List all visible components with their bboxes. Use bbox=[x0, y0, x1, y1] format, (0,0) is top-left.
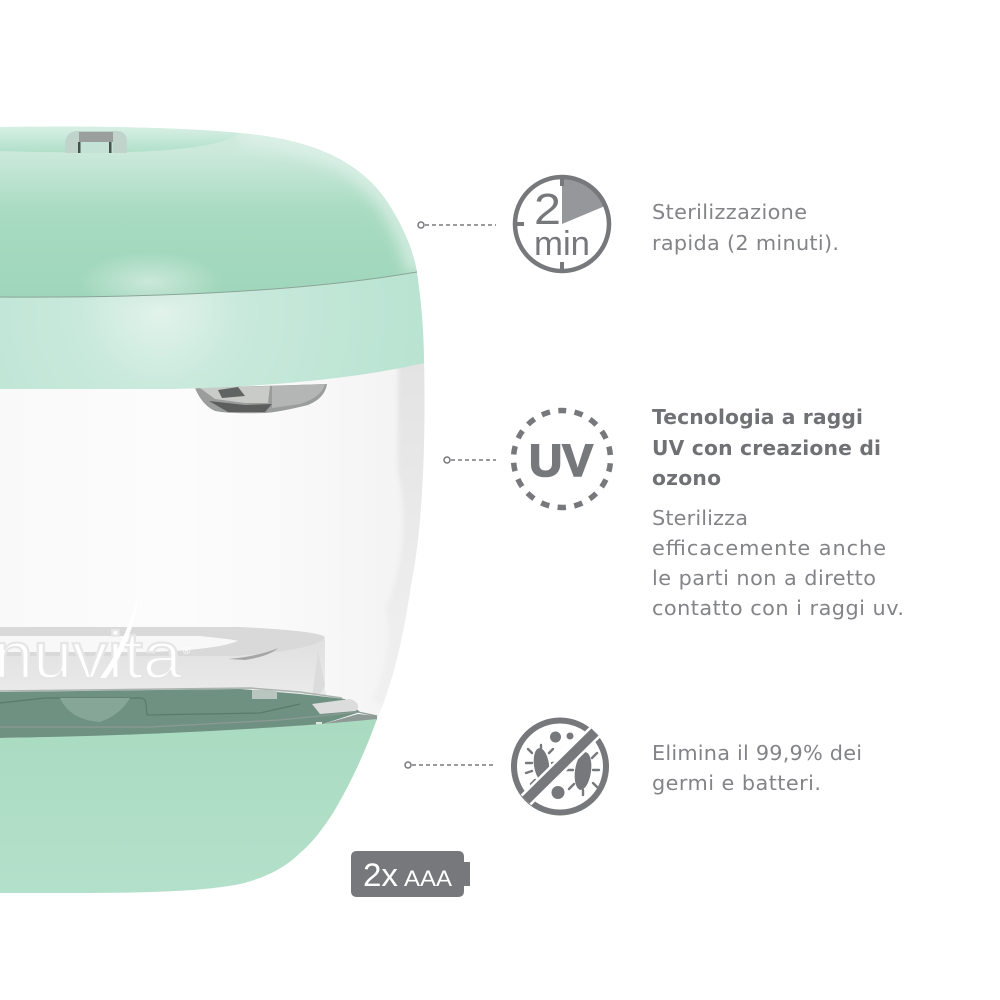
text: kills germs: Elimina il 99,9% dei bbox=[652, 741, 862, 765]
connector: UV bbox=[444, 457, 496, 463]
description bbox=[652, 506, 904, 620]
logo: nuvita: ® bbox=[183, 646, 191, 657]
text: fast sterilization: rapida (2 minuti). bbox=[652, 231, 839, 255]
logo: nuvita bbox=[0, 596, 191, 692]
description: contatto con i raggi uv. bbox=[652, 596, 904, 620]
inner tray bbox=[0, 627, 330, 705]
transparent glass body bbox=[0, 360, 424, 740]
dome edge highlight bbox=[240, 134, 417, 272]
text: kills germs: germi e batteri. bbox=[652, 771, 821, 795]
top button bbox=[65, 131, 127, 153]
glass side reflection bbox=[398, 363, 424, 566]
icon: 2 min timer: 2 bbox=[534, 185, 561, 234]
sensor under the lid bbox=[195, 384, 327, 413]
heading: ozono bbox=[652, 466, 721, 490]
tinted base window bbox=[0, 688, 377, 738]
heading bbox=[652, 405, 881, 490]
heading: Tecnologia a raggi bbox=[652, 405, 863, 429]
description: Sterilizza bbox=[652, 506, 748, 530]
description: le parti non a diretto bbox=[652, 566, 876, 590]
connector: timer bbox=[418, 222, 496, 228]
lid seam bbox=[0, 272, 417, 297]
badge: 2x AAA battery bbox=[351, 851, 470, 897]
icon: no germs bbox=[514, 720, 606, 812]
text: UV technology bbox=[652, 405, 904, 620]
top recess bbox=[0, 127, 240, 152]
heading: UV con creazione di bbox=[652, 436, 881, 460]
text: kills germs bbox=[652, 741, 862, 795]
icon: 2 min timer: min bbox=[534, 225, 590, 263]
product: nuvita UV sterilizer bbox=[0, 127, 430, 893]
text: fast sterilization: Sterilizzazione bbox=[652, 200, 807, 224]
text: fast sterilization bbox=[652, 200, 839, 255]
lid dome bbox=[0, 127, 417, 312]
description: efficacemente anche bbox=[652, 536, 886, 560]
icon: UV bbox=[514, 410, 610, 508]
badge: 2x AAA battery: AAA bbox=[404, 866, 452, 891]
connector: germs bbox=[405, 762, 496, 768]
icon: 2 min timer bbox=[514, 176, 609, 272]
badge: 2x AAA battery: 2x bbox=[363, 857, 398, 893]
icon: UV: UV bbox=[529, 435, 593, 486]
base bbox=[0, 719, 377, 893]
lid band bbox=[0, 272, 424, 389]
